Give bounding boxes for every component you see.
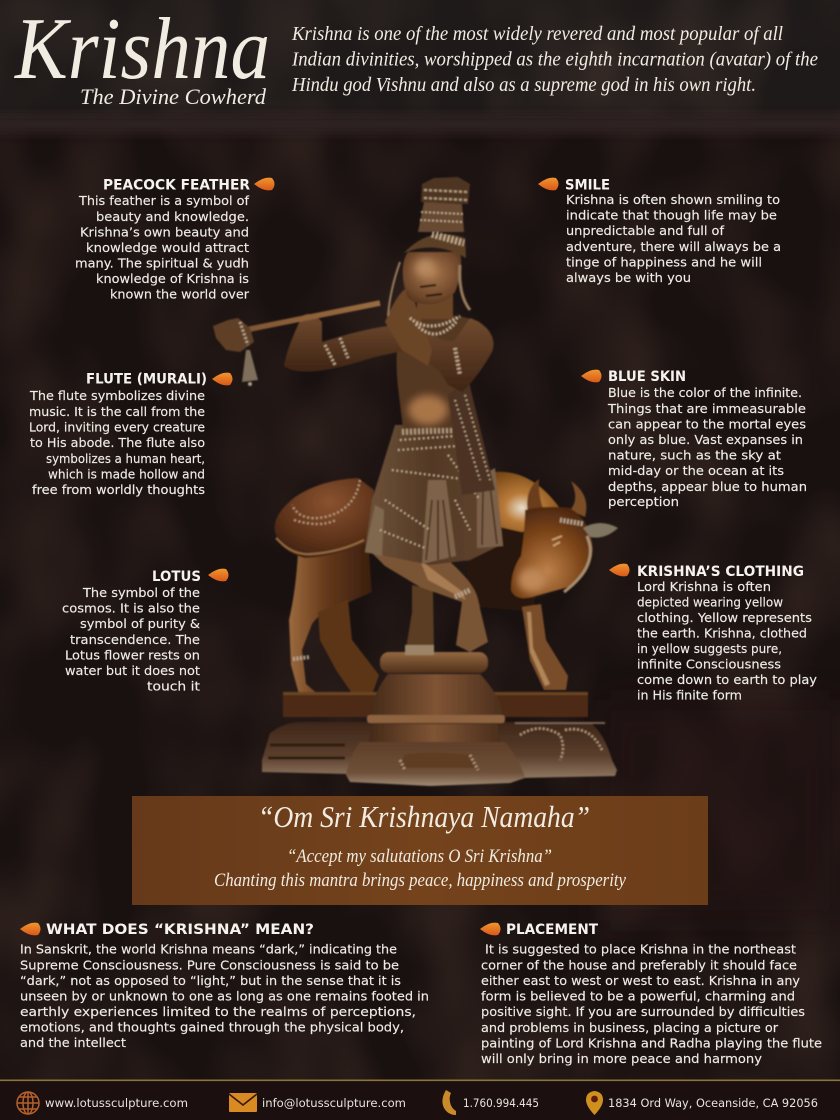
intro text block: Hindu god Vishnu and also as a supreme god in his own right.	[291, 75, 756, 96]
body text: come down to earth to play	[637, 672, 818, 687]
heading: FLUTE (MURALI)	[86, 372, 207, 388]
body text: unpredictable and full of	[566, 223, 725, 238]
phone number: 1.760.994.445	[463, 1096, 539, 1110]
body text: which is made hollow and	[48, 466, 205, 482]
mantra translation: “Accept my salutations O Sri Krishna”	[287, 847, 552, 867]
icon: petal	[581, 370, 602, 382]
panel: smile	[538, 178, 781, 285]
body text: It is suggested to place Krishna in the northeast	[485, 942, 796, 956]
body text: in His finite form	[637, 688, 742, 702]
body text	[637, 579, 818, 702]
title: Krishna	[13, 1, 270, 98]
panel: blue skin	[581, 369, 807, 509]
body text: knowledge would attract	[86, 240, 249, 255]
panel: what does Krishna mean	[20, 922, 429, 1050]
body text	[481, 942, 822, 1066]
body text: either east to west or west to east. Krishna in any	[481, 973, 801, 988]
intro text block: Krishna is one of the most widely revered and most popular of all	[291, 24, 783, 45]
body text: painting of Lord Krishna and Radha playing the flute	[481, 1036, 822, 1050]
panel: flute	[29, 372, 233, 497]
body text: can appear to the mortal eyes	[608, 416, 806, 432]
icon: petal	[480, 923, 500, 935]
body text: This feather is a symbol of	[78, 193, 250, 208]
heading: KRISHNA’S CLOTHING	[637, 564, 804, 580]
body text: depths, appear blue to human	[608, 479, 807, 494]
icon: globe	[17, 1092, 39, 1114]
heading: LOTUS	[152, 569, 201, 585]
Krishna arms and hands	[284, 286, 494, 392]
body text: Krishna’s own beauty and	[80, 224, 249, 240]
body text: “dark,” not as opposed to “light,” but in the sense that it is	[20, 973, 401, 988]
intro text block	[291, 24, 818, 96]
body text: Lotus flower rests on	[65, 648, 200, 662]
heading: PEACOCK FEATHER	[103, 178, 250, 194]
icon: petal	[254, 178, 274, 190]
body text: perception	[608, 494, 679, 509]
round pedestal	[346, 652, 525, 786]
body text	[75, 193, 250, 302]
icon: envelope	[229, 1093, 257, 1112]
body text: free from worldly thoughts	[32, 482, 205, 497]
heading: BLUE SKIN	[608, 369, 686, 385]
panel: lotus	[62, 569, 228, 694]
body text: infinite Consciousness	[637, 656, 781, 672]
body text: Blue is the color of the infinite.	[608, 385, 802, 400]
body text	[20, 942, 429, 1050]
mantra heading: “Om Sri Krishnaya Namaha”	[258, 799, 590, 834]
body text: emotions, and thoughts gained through the physical body,	[20, 1020, 404, 1034]
body text: tinge of happiness and he will	[566, 254, 762, 270]
panel: mantra banner	[132, 796, 708, 905]
body text: The symbol of the	[82, 585, 200, 600]
heading: PLACEMENT	[506, 922, 598, 938]
subtitle: The Divine Cowherd	[80, 84, 267, 109]
stepped base	[262, 692, 617, 778]
body text: cosmos. It is also the	[62, 600, 200, 616]
body text: transcendence. The	[70, 632, 200, 647]
body text: beauty and knowledge.	[96, 209, 249, 224]
body text: form is believed to be a powerful, charming and	[481, 988, 795, 1004]
body text: music. It is the call from the	[29, 404, 205, 419]
heading: WHAT DOES “KRISHNA” MEAN?	[46, 922, 314, 938]
body text: indicate that though life may be	[566, 208, 777, 222]
icon: petal	[538, 178, 558, 190]
body text: many. The spiritual & yudh	[75, 256, 249, 270]
body text: Lord Krishna is often	[637, 579, 771, 594]
body text: Lord, inviting every creature	[29, 420, 205, 434]
flute with bell	[213, 303, 380, 386]
body text	[566, 192, 781, 285]
heading: SMILE	[565, 178, 610, 194]
icon: location pin	[586, 1091, 603, 1115]
body text: The flute symbolizes divine	[29, 388, 205, 403]
body text: touch it	[147, 678, 200, 694]
body text	[607, 385, 807, 509]
statue: Krishna with cow	[213, 177, 618, 786]
body text: nature, such as the sky at	[608, 448, 781, 462]
body text: will only bring in more peace and harmony	[481, 1051, 763, 1066]
body text: Supreme Consciousness. Pure Consciousness is said to be	[20, 958, 399, 972]
body text: only as blue. Vast expanses in	[608, 432, 803, 447]
body text: Krishna is often shown smiling to	[566, 192, 780, 207]
body text	[29, 388, 205, 497]
icon: phone	[442, 1090, 456, 1115]
body text: symbolizes a human heart,	[46, 451, 205, 466]
intro text block: Indian divinities, worshipped as the eighth incarnation (avatar) of the	[291, 50, 818, 70]
address: 1834 Ord Way, Oceanside, CA 92056	[608, 1096, 818, 1110]
body text: and the intellect	[20, 1035, 126, 1050]
icon: petal	[20, 923, 40, 935]
Krishna torso and sash	[397, 314, 495, 495]
panel: Krishna's clothing	[609, 564, 818, 702]
panel: placement	[480, 922, 822, 1066]
email: info@lotussculpture.com	[262, 1096, 406, 1110]
body text: clothing. Yellow represents	[637, 610, 812, 625]
body text: earthly experiences limited to the realms of perceptions,	[20, 1004, 416, 1019]
body text: knowledge of Krishna is	[96, 271, 249, 286]
body text: the earth. Krishna, clothed	[637, 626, 807, 640]
body text: adventure, there will always be a	[566, 239, 781, 254]
body text: known the world over	[110, 286, 250, 302]
Krishna dhoti and tassels	[365, 425, 503, 565]
body text: In Sanskrit, the world Krishna means “dark,” indicating the	[20, 942, 397, 956]
body text: and problems in business, placing a picture or	[481, 1020, 779, 1035]
body text: mid-day or the ocean at its	[608, 463, 784, 478]
body text: unseen by or unknown to one as long as one remains footed in	[20, 988, 429, 1004]
panel: peacock feather	[75, 178, 274, 302]
website: www.lotussculpture.com	[45, 1096, 188, 1110]
Krishna head and crown	[388, 177, 470, 334]
icon: petal	[212, 373, 232, 385]
body text: corner of the house and preferably it should face	[481, 958, 797, 972]
icon: petal	[609, 564, 630, 576]
cow rear body and saddle	[275, 478, 379, 698]
body text: always be with you	[566, 270, 691, 285]
footer contact bar	[0, 1080, 840, 1115]
Krishna legs	[372, 553, 488, 655]
body text: to His abode. The flute also	[30, 435, 205, 450]
cow front body, head and horns	[462, 472, 618, 690]
body text: in yellow suggests pure,	[637, 641, 782, 656]
body text: symbol of purity &	[80, 616, 200, 631]
body text: Things that are immeasurable	[607, 401, 806, 416]
body text: water but it does not	[65, 663, 200, 678]
body text: depicted wearing yellow	[637, 594, 783, 610]
body text	[62, 585, 200, 694]
icon: petal	[208, 569, 228, 581]
mantra benefit: Chanting this mantra brings peace, happiness and prosperity	[214, 871, 627, 891]
body text: positive sight. If you are surrounded by difficulties	[481, 1004, 805, 1019]
